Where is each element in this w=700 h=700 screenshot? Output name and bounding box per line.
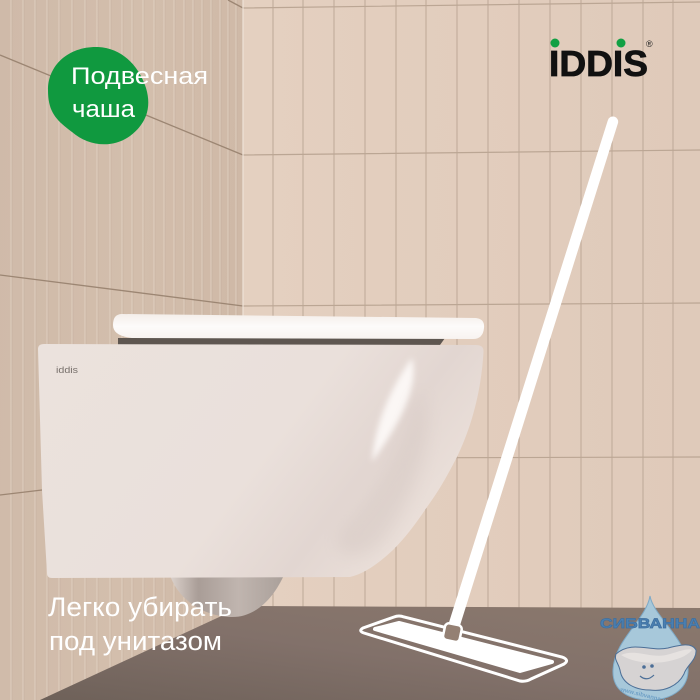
heading: hanging bowl: Подвесная [71,63,208,90]
toilet highlight [372,358,414,462]
water drop [613,596,688,700]
right tiled wall [243,0,700,610]
watermark: Sibvanna logo [600,596,700,700]
mop pad outline [361,616,567,681]
green blob badge [48,47,148,144]
logo: IDDIS: ® [646,39,653,49]
bathtub mascot [615,645,696,690]
caption: easy to clean [48,592,232,656]
toilet lid [113,314,484,339]
left tiled wall [0,0,244,700]
mascot face [640,665,654,679]
caption: easy to clean: под унитазом [49,626,222,656]
mop [361,117,618,681]
logo: IDDIS: IDDIS [549,43,648,84]
caption: easy to clean: Легко убирать [48,592,232,622]
mop pad [375,623,552,671]
floor [40,606,700,700]
toilet [38,314,484,578]
toilet gap shadow [118,338,445,345]
toilet body [38,344,484,578]
watermark name: СИБВАННА [600,615,700,631]
mop joint [442,623,462,643]
toilet soft shading [337,390,427,556]
small brand mark: iddis [56,365,78,376]
heading: hanging bowl [71,63,208,123]
drain bowl under the toilet [170,575,284,617]
mop handle [449,117,618,627]
heading: hanging bowl: чаша [72,96,136,123]
bathtub rim [621,649,692,663]
